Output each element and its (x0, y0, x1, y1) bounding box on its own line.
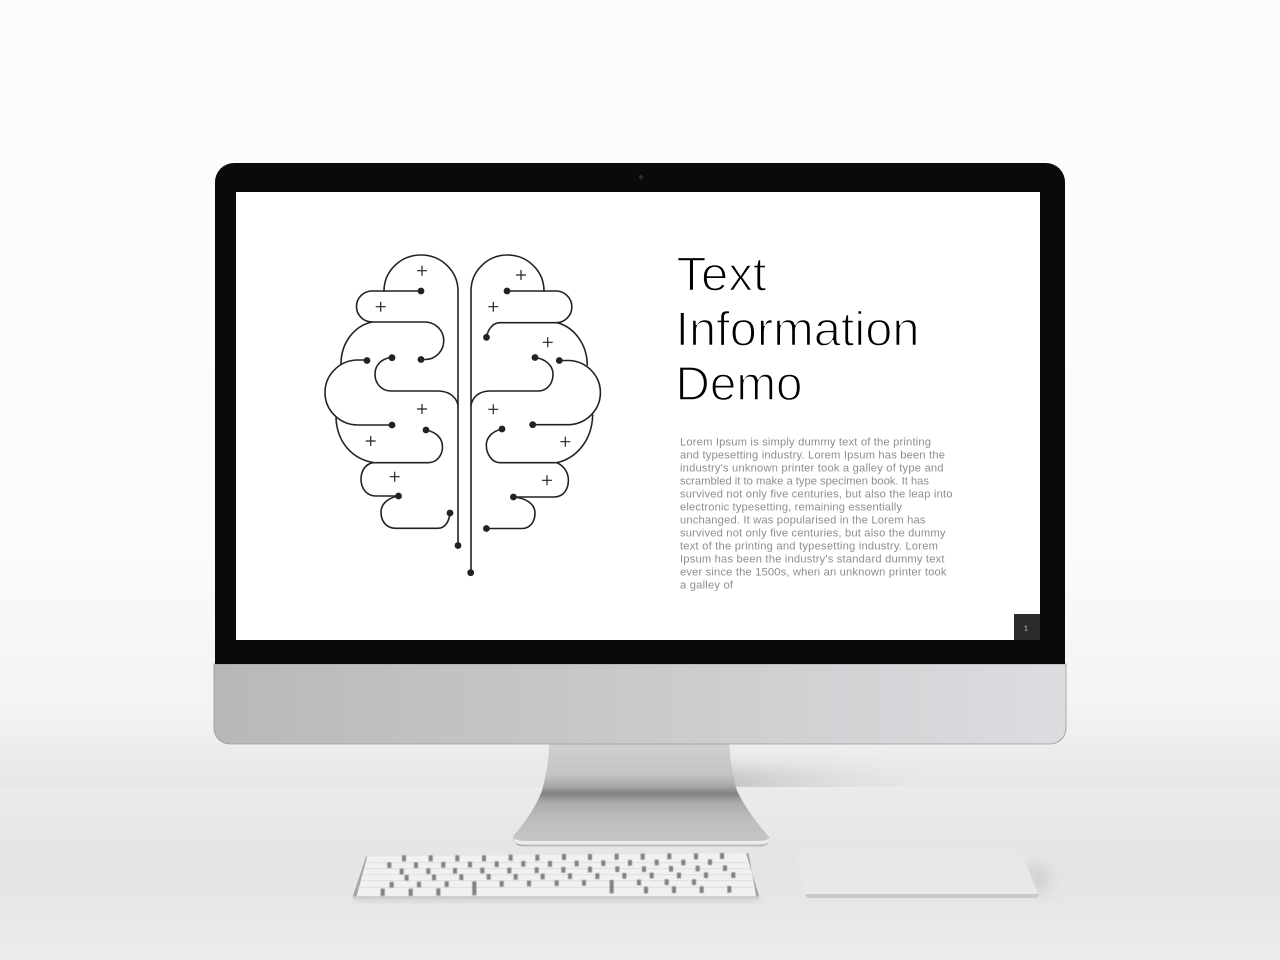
body text block: a galley of (680, 580, 734, 592)
key rows (358, 863, 755, 887)
connector dots (364, 288, 563, 576)
body text block (680, 436, 952, 592)
body text block: Lorem Ipsum is simply dummy text of the printing (680, 436, 931, 448)
trackpad shadow (1023, 863, 1047, 894)
stand shadow on wall (731, 762, 840, 787)
keyboard (353, 853, 761, 903)
title: Demo (676, 357, 802, 411)
keyboard shadow (353, 899, 761, 903)
right hemisphere lines (471, 255, 600, 573)
plus marks (366, 266, 570, 485)
title: Information (676, 302, 920, 356)
body text block: industry's unknown printer took a galley of type and (680, 462, 944, 474)
key gaps (381, 853, 735, 896)
trackpad top surface (797, 853, 1038, 895)
body text block: survived not only five centuries, but also the leap into (680, 488, 952, 500)
monitor (214, 163, 1066, 744)
body text block: and typesetting industry. Lorem Ipsum has been the (680, 450, 945, 462)
webcam (639, 175, 643, 179)
body text block: scrambled it to make a type specimen book. It has (680, 476, 929, 488)
trackpad (797, 853, 1047, 898)
body text block: text of the printing and typesetting industry. Lorem (680, 540, 938, 552)
keyboard body (353, 853, 759, 899)
body text block: ever since the 1500s, when an unknown printer took (680, 566, 947, 578)
body text block: survived not only five centuries, but also the dummy (680, 528, 946, 540)
title (676, 248, 920, 411)
trackpad edge (805, 894, 1039, 898)
monitor black bezel (215, 163, 1065, 664)
monitor chin (214, 664, 1066, 744)
body text block: Ipsum has been the industry's standard dummy text (680, 554, 945, 566)
left hemisphere lines (325, 255, 458, 545)
page number badge (1014, 614, 1040, 640)
monitor stand (513, 744, 770, 846)
body text block: unchanged. It was popularised in the Lorem has (680, 514, 926, 526)
title: Text (676, 248, 767, 302)
page number badge: 1 (1024, 626, 1028, 632)
body text block: electronic typesetting, remaining essentially (680, 502, 902, 514)
screen (236, 192, 1040, 640)
brain line icon (325, 255, 600, 576)
background: desk (0, 787, 1280, 960)
